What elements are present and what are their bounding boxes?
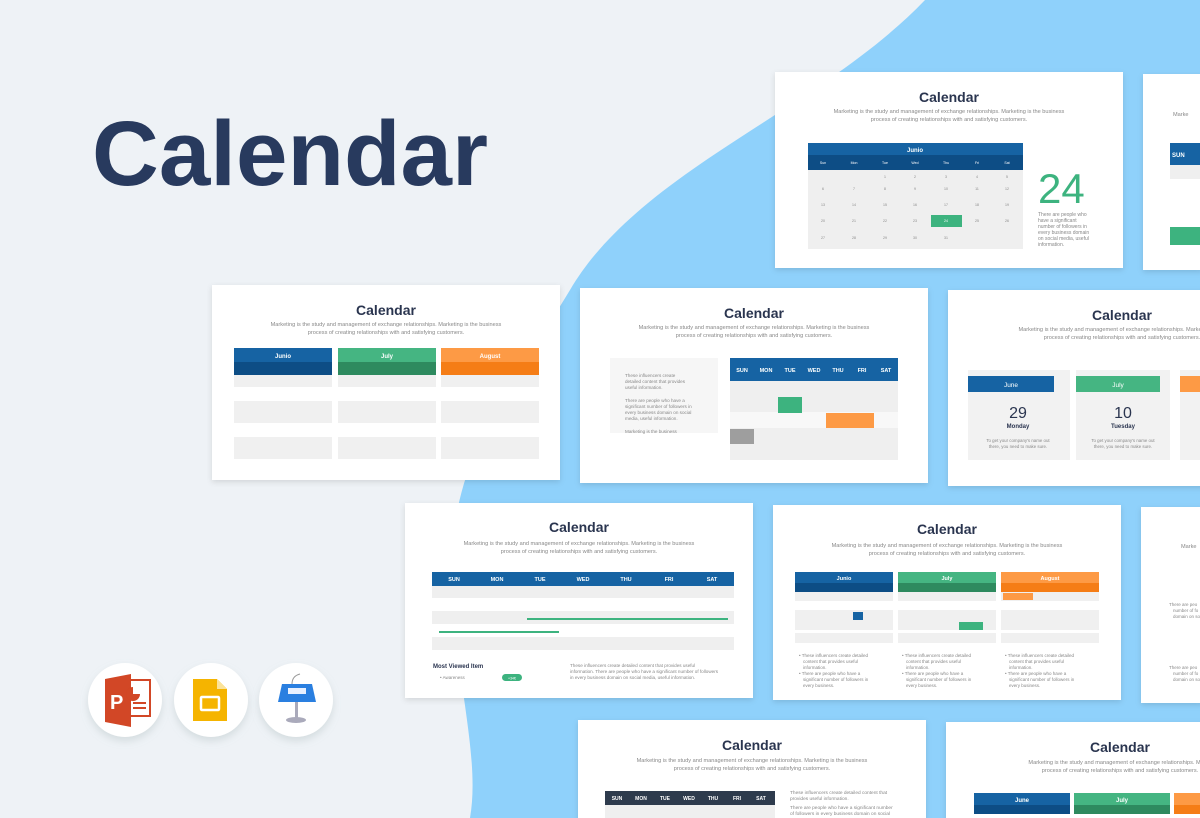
most viewed item: • Awareness bbox=[440, 675, 466, 680]
calendar grid: Sat bbox=[1004, 161, 1010, 165]
calendar grid: 24 bbox=[944, 219, 948, 223]
bullets: • There are people who have a bbox=[1005, 671, 1067, 676]
calendar: MON bbox=[760, 368, 772, 374]
description: in every business domain on social media, useful information. bbox=[570, 675, 695, 680]
card July: there, you need to make sure. bbox=[1094, 444, 1152, 449]
week calendar: SUN bbox=[448, 577, 460, 583]
icon: powerpoint: P bbox=[110, 692, 123, 714]
calendar grid: Fri bbox=[975, 161, 979, 165]
calendar: TUE bbox=[784, 368, 796, 374]
slide 7: three months with bullets: Calendar bbox=[917, 521, 978, 537]
slide 9: bottom calendar: process of creating relationships with and satisfying customers. bbox=[674, 766, 831, 772]
calendar grid: 2 bbox=[914, 175, 916, 179]
card June bbox=[968, 370, 1070, 460]
calendar grid: 22 bbox=[883, 219, 887, 223]
calendar grid: Thu bbox=[943, 161, 949, 165]
slide 9: bottom calendar bbox=[578, 720, 926, 818]
card July: Tuesday bbox=[1111, 424, 1136, 430]
most viewed item: +34€ bbox=[508, 676, 516, 680]
calendar grid: 18 bbox=[975, 203, 979, 207]
description: These influencers create detailed content that provides useful bbox=[570, 663, 695, 668]
month Junio bbox=[795, 572, 893, 643]
card August partial bbox=[1180, 370, 1200, 460]
notes box: detailed content that provides bbox=[625, 379, 686, 384]
calendar grid: 28 bbox=[852, 236, 856, 240]
slide 9: bottom calendar: There are people who have a significant number bbox=[790, 805, 893, 811]
week calendar: THU bbox=[620, 577, 632, 583]
slide 3: three months bbox=[212, 285, 560, 480]
week calendar: TUE bbox=[534, 577, 546, 583]
background blob bbox=[451, 0, 1200, 818]
notes box: media, useful information. bbox=[625, 416, 678, 421]
slide 8: partial right bbox=[1141, 507, 1200, 703]
slide 8: partial right: number of fo bbox=[1173, 608, 1199, 613]
month July: July bbox=[941, 576, 953, 582]
slide 6: week calendar with bars bbox=[405, 503, 753, 698]
slide 8: partial right: There are peo bbox=[1169, 602, 1198, 607]
date description: on social media, useful bbox=[1038, 236, 1089, 242]
bullets: every business. bbox=[906, 683, 937, 688]
card June: June bbox=[1004, 382, 1018, 389]
date description: number of followers in bbox=[1038, 224, 1087, 230]
calendar grid: 23 bbox=[913, 219, 917, 223]
slide 4: calendar with notes: Calendar bbox=[724, 305, 785, 321]
calendar grid: 1 bbox=[884, 175, 886, 179]
calendar grid: 3 bbox=[945, 175, 947, 179]
card July: To get your company's name out bbox=[1091, 438, 1155, 443]
calendar: THU bbox=[832, 368, 844, 374]
bullets: significant number of followers in bbox=[1009, 677, 1075, 682]
bullets: • These influencers create detailed bbox=[1005, 653, 1075, 658]
slide 10: bottom right months: process of creating relationships with and satisfying customers. bbox=[1042, 768, 1199, 774]
notes box bbox=[610, 358, 718, 434]
slide 4: calendar with notes: Marketing is the study and management of exchange relationships. Marketing is the business bbox=[639, 325, 870, 331]
slide 10: bottom right months: July bbox=[1116, 798, 1129, 804]
slide 9: bottom calendar: Calendar bbox=[722, 737, 783, 753]
calendar grid: 17 bbox=[944, 203, 948, 207]
calendar grid: 27 bbox=[821, 236, 825, 240]
card July bbox=[1076, 370, 1170, 460]
most viewed item bbox=[433, 664, 522, 681]
calendar grid: 12 bbox=[1005, 187, 1009, 191]
card June: 29 bbox=[1009, 405, 1027, 422]
calendar grid: 6 bbox=[822, 187, 824, 191]
slide 1: junio single month with 24: Calendar bbox=[919, 89, 980, 105]
slide 9: bottom calendar: These influencers create detailed content that bbox=[790, 790, 888, 796]
slide 10: bottom right months: June bbox=[1015, 798, 1030, 804]
big date 24: 24 bbox=[1038, 165, 1085, 212]
slide 3: three months: Calendar bbox=[356, 302, 417, 318]
calendar grid: 30 bbox=[913, 236, 917, 240]
slide 9: bottom calendar: provides useful information. bbox=[790, 796, 849, 802]
slide 3: three months: Marketing is the study and management of exchange relationships. Marketing is the business bbox=[271, 322, 502, 328]
slide 1: junio single month with 24: process of creating relationships with and satisfying customers. bbox=[871, 117, 1028, 123]
slide 4: calendar with notes: process of creating relationships with and satisfying customers. bbox=[676, 333, 833, 339]
calendar grid: 15 bbox=[883, 203, 887, 207]
bullets: content that provides useful bbox=[906, 659, 961, 664]
slide 7: three months with bullets: process of creating relationships with and satisfying customers. bbox=[869, 551, 1026, 557]
notes box: These influencers create bbox=[625, 373, 676, 378]
month: Junio: Junio bbox=[275, 354, 291, 360]
notes box: There are people who have a bbox=[625, 398, 685, 403]
calendar grid: 8 bbox=[884, 187, 886, 191]
slide 5: date cards bbox=[948, 290, 1200, 486]
calendar grid: 10 bbox=[944, 187, 948, 191]
slide 8: partial right: number of fo bbox=[1173, 671, 1199, 676]
calendar grid: 21 bbox=[852, 219, 856, 223]
date description: information. bbox=[1038, 242, 1064, 248]
slide 9: bottom calendar: TUE bbox=[660, 796, 671, 802]
slide 3: three months: process of creating relationships with and satisfying customers. bbox=[308, 330, 465, 336]
card June: Monday bbox=[1007, 424, 1030, 430]
bullets: every business. bbox=[803, 683, 834, 688]
bullets: • There are people who have a bbox=[799, 671, 861, 676]
calendar grid: 4 bbox=[976, 175, 978, 179]
slide 8: partial right: domain on so bbox=[1173, 614, 1200, 619]
calendar grid: 13 bbox=[821, 203, 825, 207]
calendar grid: Wed bbox=[911, 161, 919, 165]
slide 9: bottom calendar: of followers in every business domain on social bbox=[790, 811, 890, 817]
bullets: information. bbox=[1009, 665, 1033, 670]
bullets: content that provides useful bbox=[803, 659, 858, 664]
calendar: WED bbox=[808, 368, 820, 374]
slide 6: week calendar with bars: Marketing is the study and management of exchange relationships. Marketing is the business bbox=[464, 541, 695, 547]
slide 2: partial right: Marke bbox=[1173, 112, 1189, 118]
card June: there, you need to make sure. bbox=[989, 444, 1047, 449]
notes box: every business domain on social bbox=[625, 410, 691, 415]
slide 7: three months with bullets bbox=[773, 505, 1121, 700]
slide 2: partial right bbox=[1143, 74, 1200, 270]
bullets: every business. bbox=[1009, 683, 1040, 688]
notes box: Marketing is the business bbox=[625, 429, 678, 434]
slide 8: partial right: There are peo bbox=[1169, 665, 1198, 670]
calendar grid: Tue bbox=[882, 161, 888, 165]
month Junio: Junio bbox=[837, 576, 852, 582]
slide 1: junio single month with 24: Marketing is the study and management of exchange relationships. Marketing is the business bbox=[834, 109, 1065, 115]
month: August: August bbox=[480, 354, 500, 360]
main title: Calendar bbox=[92, 103, 488, 205]
notes box: significant number of followers in bbox=[625, 404, 692, 409]
calendar grid: 19 bbox=[1005, 203, 1009, 207]
calendar grid: 25 bbox=[975, 219, 979, 223]
calendar grid: 7 bbox=[853, 187, 855, 191]
bullets: significant number of followers in bbox=[906, 677, 972, 682]
slide 4: calendar with notes bbox=[580, 288, 928, 483]
bullets: • There are people who have a bbox=[902, 671, 964, 676]
bullets: • These influencers create detailed bbox=[902, 653, 972, 658]
slide 2: partial right: SUN bbox=[1172, 153, 1185, 159]
slide 10: bottom right months bbox=[946, 722, 1200, 818]
calendar bbox=[730, 358, 898, 460]
slide 9: bottom calendar: SUN bbox=[612, 796, 623, 802]
calendar grid: 31 bbox=[944, 236, 948, 240]
bullets: content that provides useful bbox=[1009, 659, 1064, 664]
week calendar bbox=[432, 572, 734, 650]
icon: keynote bbox=[259, 663, 333, 737]
date description bbox=[1038, 212, 1089, 248]
slide 8: partial right: Marke bbox=[1181, 544, 1197, 550]
slide 9: bottom calendar: THU bbox=[708, 796, 719, 802]
calendar: FRI bbox=[858, 368, 867, 374]
date description: There are people who bbox=[1038, 212, 1087, 218]
slide 9: bottom calendar: WED bbox=[683, 796, 695, 802]
card June: To get your company's name out bbox=[986, 438, 1050, 443]
month: Junio bbox=[234, 348, 332, 459]
slide 6: week calendar with bars: Calendar bbox=[549, 519, 610, 535]
month July bbox=[898, 572, 996, 643]
month: July bbox=[338, 348, 436, 459]
bullets: information. bbox=[906, 665, 930, 670]
slide 7: three months with bullets: Marketing is the study and management of exchange relationships. Marketing is the business bbox=[832, 543, 1063, 549]
slide 9: bottom calendar: MON bbox=[635, 796, 647, 802]
card July: 10 bbox=[1114, 405, 1132, 422]
icon: google slides bbox=[174, 663, 248, 737]
slide 9: bottom calendar: SAT bbox=[756, 796, 766, 802]
slide 5: date cards: process of creating relationships with and satisfying customers. bbox=[1044, 335, 1200, 341]
description: information. There are people who have a significant number of followers bbox=[570, 669, 719, 674]
slide 5: date cards: Calendar bbox=[1092, 307, 1153, 323]
notes box: useful information. bbox=[625, 385, 663, 390]
calendar: SUN bbox=[736, 368, 748, 374]
week calendar: MON bbox=[491, 577, 503, 583]
description bbox=[570, 663, 719, 680]
slide 6: week calendar with bars: process of creating relationships with and satisfying customers. bbox=[501, 549, 658, 555]
most viewed item: Most Viewed Item bbox=[433, 664, 483, 670]
calendar grid: 11 bbox=[975, 187, 979, 191]
icon: powerpoint bbox=[88, 663, 162, 737]
bullets bbox=[799, 653, 1075, 688]
month August: August bbox=[1041, 576, 1060, 582]
date description: have a significant bbox=[1038, 218, 1077, 224]
slide 1: junio single month with 24 bbox=[775, 72, 1123, 268]
week calendar: WED bbox=[577, 577, 589, 583]
slide 9: bottom calendar: FRI bbox=[733, 796, 742, 802]
calendar grid: Junio bbox=[907, 148, 923, 154]
bullets: • These influencers create detailed bbox=[799, 653, 869, 658]
bullets: significant number of followers in bbox=[803, 677, 869, 682]
calendar grid: 16 bbox=[913, 203, 917, 207]
slide 9: bottom calendar: Marketing is the study and management of exchange relationships. Marketing is the business bbox=[637, 758, 868, 764]
calendar grid: 9 bbox=[914, 187, 916, 191]
calendar: SAT bbox=[881, 368, 892, 374]
month August bbox=[1001, 572, 1099, 643]
calendar grid: 20 bbox=[821, 219, 825, 223]
slide 10: bottom right months: Calendar bbox=[1090, 739, 1151, 755]
calendar grid: 29 bbox=[883, 236, 887, 240]
week calendar: SAT bbox=[707, 577, 718, 583]
slide 8: partial right: domain on so bbox=[1173, 677, 1200, 682]
calendar grid: 14 bbox=[852, 203, 856, 207]
bullets: information. bbox=[803, 665, 827, 670]
calendar grid: 5 bbox=[1006, 175, 1008, 179]
calendar grid: Mon bbox=[851, 161, 857, 165]
week calendar: FRI bbox=[665, 577, 674, 583]
month: July: July bbox=[381, 354, 394, 360]
calendar grid: 26 bbox=[1005, 219, 1009, 223]
month: August bbox=[441, 348, 539, 459]
card July: July bbox=[1112, 382, 1125, 389]
date description: every business domain bbox=[1038, 230, 1089, 236]
calendar grid bbox=[808, 143, 1023, 249]
calendar grid: Sun bbox=[820, 161, 826, 165]
